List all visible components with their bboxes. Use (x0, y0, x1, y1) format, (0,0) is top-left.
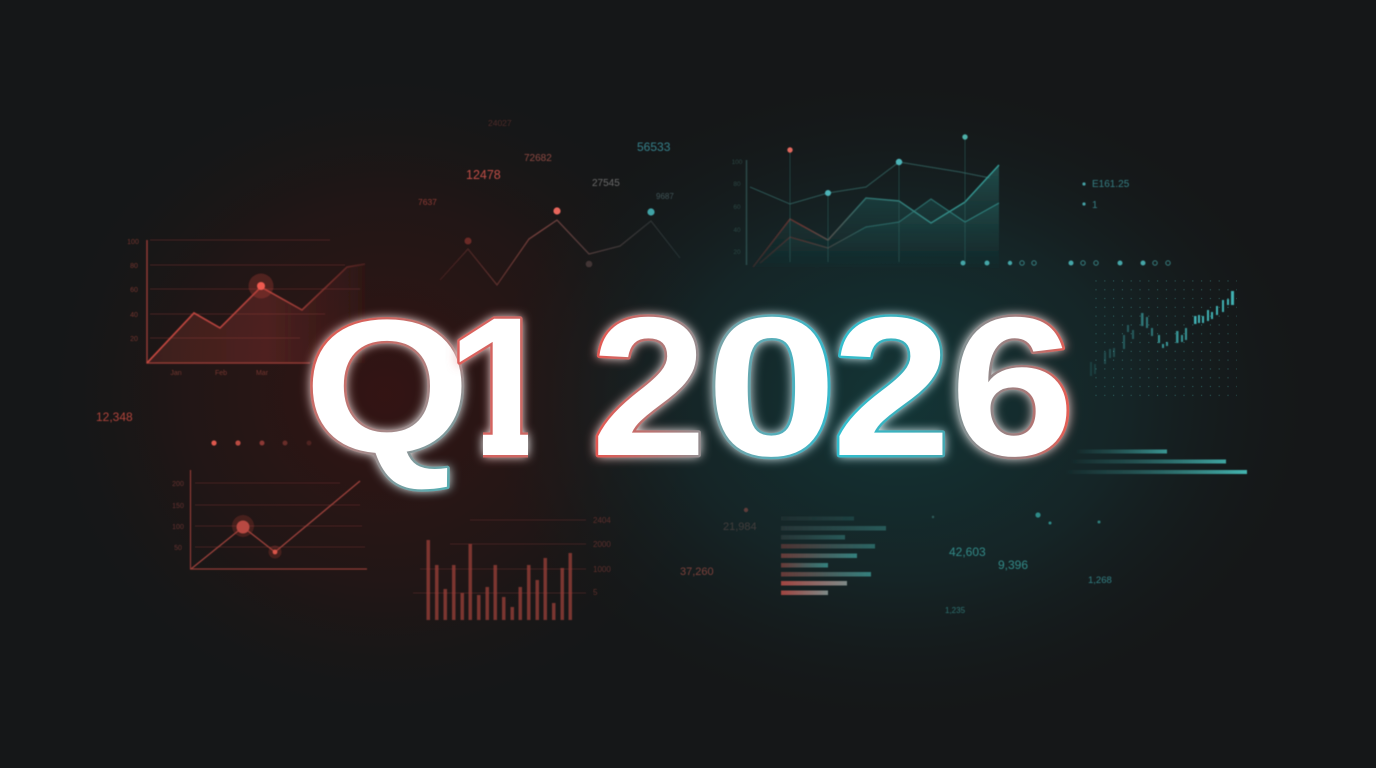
title: Q1 2026: 6 (950, 276, 1075, 497)
legend values top right: 1 (1092, 200, 1098, 211)
floating numbers top centre: 56533 (637, 140, 671, 154)
chart: red line chart bottom left: 50 (174, 545, 182, 552)
floating numbers lower right: 1,268 (1088, 575, 1112, 586)
floating numbers top centre: 12478 (466, 168, 501, 182)
y axis labels: 20 (130, 336, 138, 343)
dot row red (211, 440, 311, 446)
x axis labels (170, 370, 269, 377)
floating numbers lower right: 1,235 (945, 606, 966, 615)
y axis labels: 40 (130, 312, 138, 319)
title: Q1 2026: 1 (446, 277, 557, 498)
title: Q1 2026: 2 (591, 277, 707, 498)
chart: red line chart bottom left: 200 (172, 481, 184, 488)
chart: red bar chart bottom: 1000 (593, 565, 611, 574)
y axis labels (127, 239, 139, 343)
data points (232, 515, 282, 558)
title: Q1 2026 (302, 306, 1078, 500)
chart: teal area chart top right (732, 134, 999, 268)
chart: red area line chart top left (127, 239, 365, 377)
chart: red bar chart bottom: 2000 (593, 540, 611, 549)
floating numbers top centre: 24027 (488, 118, 512, 128)
floating numbers top centre (418, 118, 674, 207)
floating numbers lower right: 9,396 (998, 558, 1028, 572)
title: Q1 2026: Q (304, 280, 470, 492)
y axis labels: 100 (127, 239, 139, 246)
chart: red bar chart bottom (413, 516, 611, 620)
dot row teal (960, 260, 1170, 266)
stat: 12,348: 12,348 (96, 410, 133, 424)
chart: red line chart bottom left: 150 (172, 503, 184, 510)
chart: red bar chart bottom: 5 (593, 588, 598, 597)
floating numbers lower centre: 37,260 (680, 566, 714, 578)
chart: red line chart bottom left (172, 470, 367, 569)
floating numbers lower centre (680, 508, 757, 578)
floating numbers lower right: 42,603 (949, 545, 986, 559)
floating numbers lower centre: 21,984 (723, 521, 757, 533)
title: Q1 2026: 0 (706, 277, 837, 498)
y axis labels: 80 (130, 263, 138, 270)
floating numbers top centre: 27545 (592, 178, 620, 189)
chart: red bar chart bottom: 2404 (593, 516, 611, 525)
legend values top right: E161.25 (1092, 179, 1130, 190)
floating numbers lower right (932, 512, 1112, 615)
glowing horizontal bars (1065, 450, 1247, 474)
floating numbers top centre: 72682 (524, 153, 552, 164)
chart: teal area chart top right: 60 (733, 204, 741, 211)
legend values top right (1082, 179, 1130, 211)
chart: candlesticks with dot grid (1090, 280, 1237, 402)
y axis labels: 60 (130, 287, 138, 294)
x axis labels: Mar (256, 370, 269, 377)
chart: teal area chart top right: 80 (733, 181, 741, 188)
x axis labels: Jan (170, 370, 182, 377)
chart: teal area chart top right: 40 (733, 227, 741, 234)
chart: red line chart bottom left: 100 (172, 524, 184, 531)
x axis labels: Feb (215, 370, 227, 377)
data points (464, 207, 655, 267)
title: Q1 2026: 2 (832, 275, 951, 497)
chart: teal area chart top right: 20 (733, 249, 741, 256)
data points (787, 134, 968, 196)
highlighted point (248, 274, 274, 298)
chart: horizontal bars (781, 516, 886, 595)
floating numbers top centre: 9687 (656, 192, 674, 201)
chart: line chart top centre (440, 207, 680, 285)
floating numbers top centre: 7637 (418, 197, 437, 207)
chart: teal area chart top right: 100 (732, 159, 743, 166)
